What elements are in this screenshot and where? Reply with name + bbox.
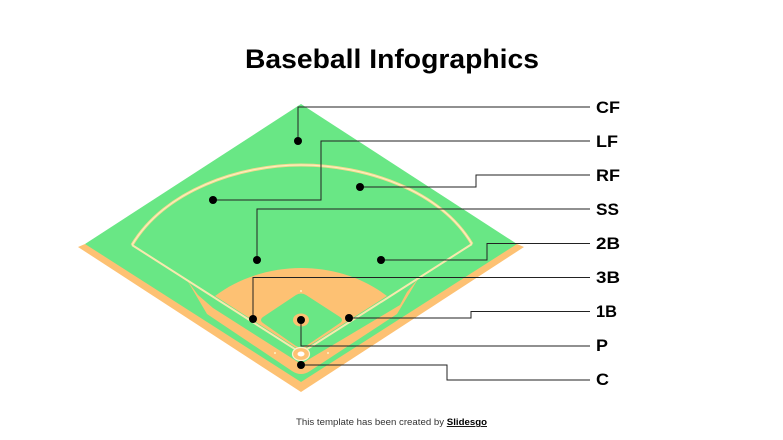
line CF bbox=[298, 107, 590, 141]
field grass bbox=[85, 104, 517, 382]
infield dirt bbox=[215, 268, 387, 351]
position labels: C bbox=[596, 370, 609, 389]
line LF bbox=[213, 141, 590, 200]
foul territory band bbox=[187, 279, 418, 374]
foul lines bbox=[132, 244, 472, 353]
line 1B bbox=[349, 312, 590, 318]
home plate bbox=[292, 348, 310, 360]
footer credit: This template has been created by Slidesgo bbox=[296, 417, 488, 427]
line 2B bbox=[381, 244, 590, 260]
pitcher mound bbox=[293, 314, 309, 326]
leader lines bbox=[213, 107, 590, 380]
position labels: LF bbox=[596, 132, 618, 151]
position labels: SS bbox=[596, 200, 619, 219]
position labels: CF bbox=[596, 98, 620, 117]
baseball field bbox=[78, 104, 524, 392]
line P bbox=[301, 320, 590, 346]
inner diamond bbox=[261, 294, 342, 348]
line SS bbox=[257, 209, 590, 260]
position labels: P bbox=[596, 336, 608, 355]
position labels bbox=[596, 98, 620, 389]
position labels: 2B bbox=[596, 234, 620, 253]
line C bbox=[301, 365, 590, 380]
bases bbox=[274, 290, 348, 354]
line RF bbox=[360, 175, 590, 187]
position labels: 3B bbox=[596, 268, 620, 287]
position labels: RF bbox=[596, 166, 620, 185]
fence arc highlight bbox=[132, 165, 472, 245]
title: Baseball Infographics bbox=[245, 44, 539, 74]
position dots bbox=[209, 137, 385, 369]
line 3B bbox=[253, 278, 590, 319]
field base bbox=[78, 244, 524, 392]
outfield grass bbox=[132, 165, 472, 353]
fence arc bbox=[132, 165, 472, 245]
position labels: 1B bbox=[596, 302, 617, 321]
